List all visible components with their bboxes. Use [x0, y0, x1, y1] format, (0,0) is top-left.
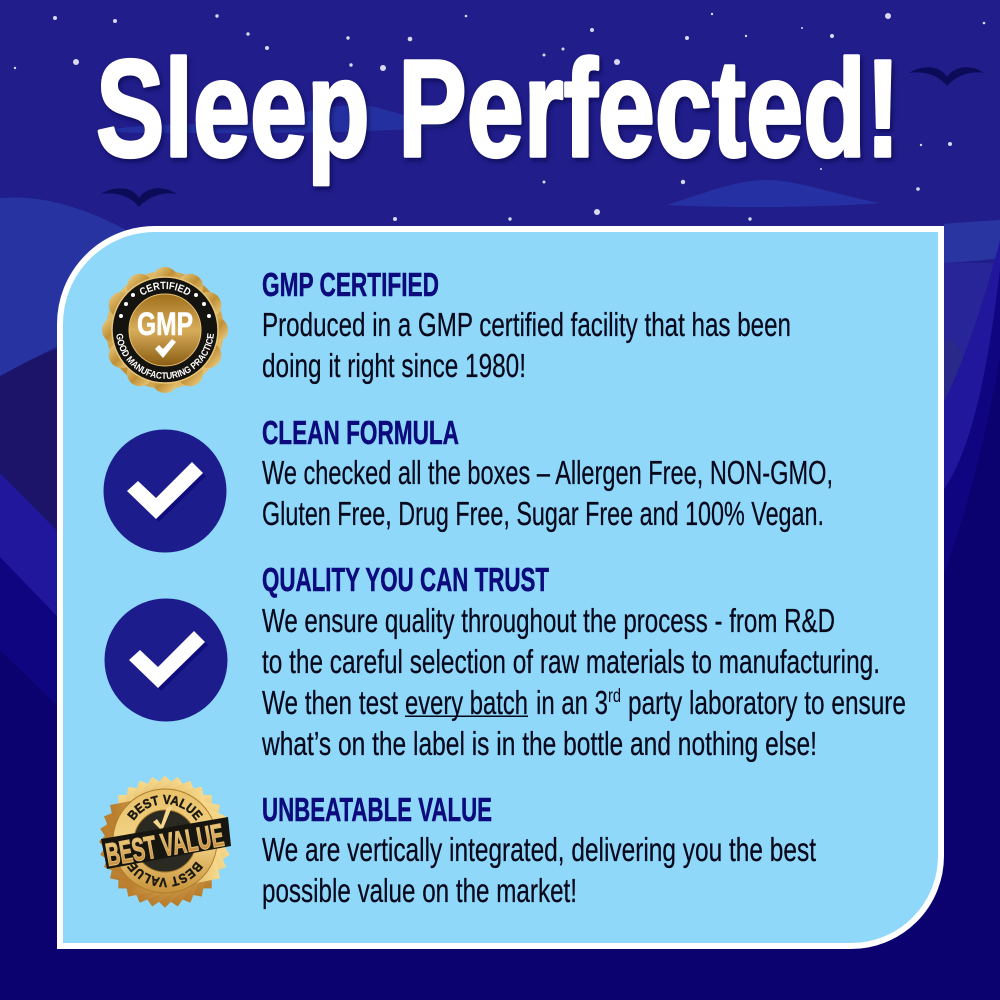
text block: quality you can trust: what’s on the label is in the bottle and nothing else! [261, 725, 817, 762]
icon: bird left [101, 188, 177, 207]
text block: quality you can trust: every batch [405, 684, 528, 721]
icon: best value badge [99, 776, 231, 908]
text block: quality you can trust [261, 561, 906, 762]
text block: quality you can trust: We then test [262, 684, 398, 721]
text block: GMP certified: GMP CERTIFIED [262, 266, 439, 303]
text block: unbeatable value: UNBEATABLE VALUE [262, 791, 492, 828]
icon: checkmark circle clean formula [104, 430, 226, 552]
icon: best value badge: BEST VALUE [126, 794, 204, 821]
icon: best value badge: BEST VALUE [126, 861, 204, 888]
text block: clean formula: CLEAN FORMULA [262, 414, 459, 451]
icon: GMP certified badge: GOOD MANUFACTURING PRACTICE [116, 333, 214, 379]
icon: GMP certified badge [102, 267, 228, 393]
background: stars [14, 13, 985, 221]
text block: quality you can trust: party laboratory to ensure [628, 684, 906, 721]
text block: GMP certified: doing it right since 1980! [262, 347, 526, 384]
icon: GMP certified badge: GMP [137, 306, 193, 342]
text block: unbeatable value: possible value on the market! [262, 872, 577, 909]
background: distant hills [0, 105, 1000, 376]
icon: GMP certified badge: CERTIFIED [140, 282, 190, 295]
icon: bird right [909, 67, 984, 86]
text block: clean formula [262, 414, 833, 532]
text block: GMP certified [262, 266, 791, 384]
text block: unbeatable value [262, 791, 816, 909]
icon: checkmark circle quality [104, 598, 228, 722]
text block: unbeatable value: We are vertically integrated, delivering you the best [262, 831, 816, 868]
text block: GMP certified: Produced in a GMP certified facility that has been [262, 306, 791, 343]
text block: quality you can trust: rd [608, 686, 621, 707]
panel: benefits card [60, 229, 941, 946]
text block: quality you can trust: in an 3 [536, 684, 608, 721]
text block: quality you can trust: QUALITY YOU CAN TRUST [262, 561, 549, 598]
background: mountain layers [0, 240, 1000, 1000]
icon: best value badge: BEST VALUE [103, 817, 226, 873]
